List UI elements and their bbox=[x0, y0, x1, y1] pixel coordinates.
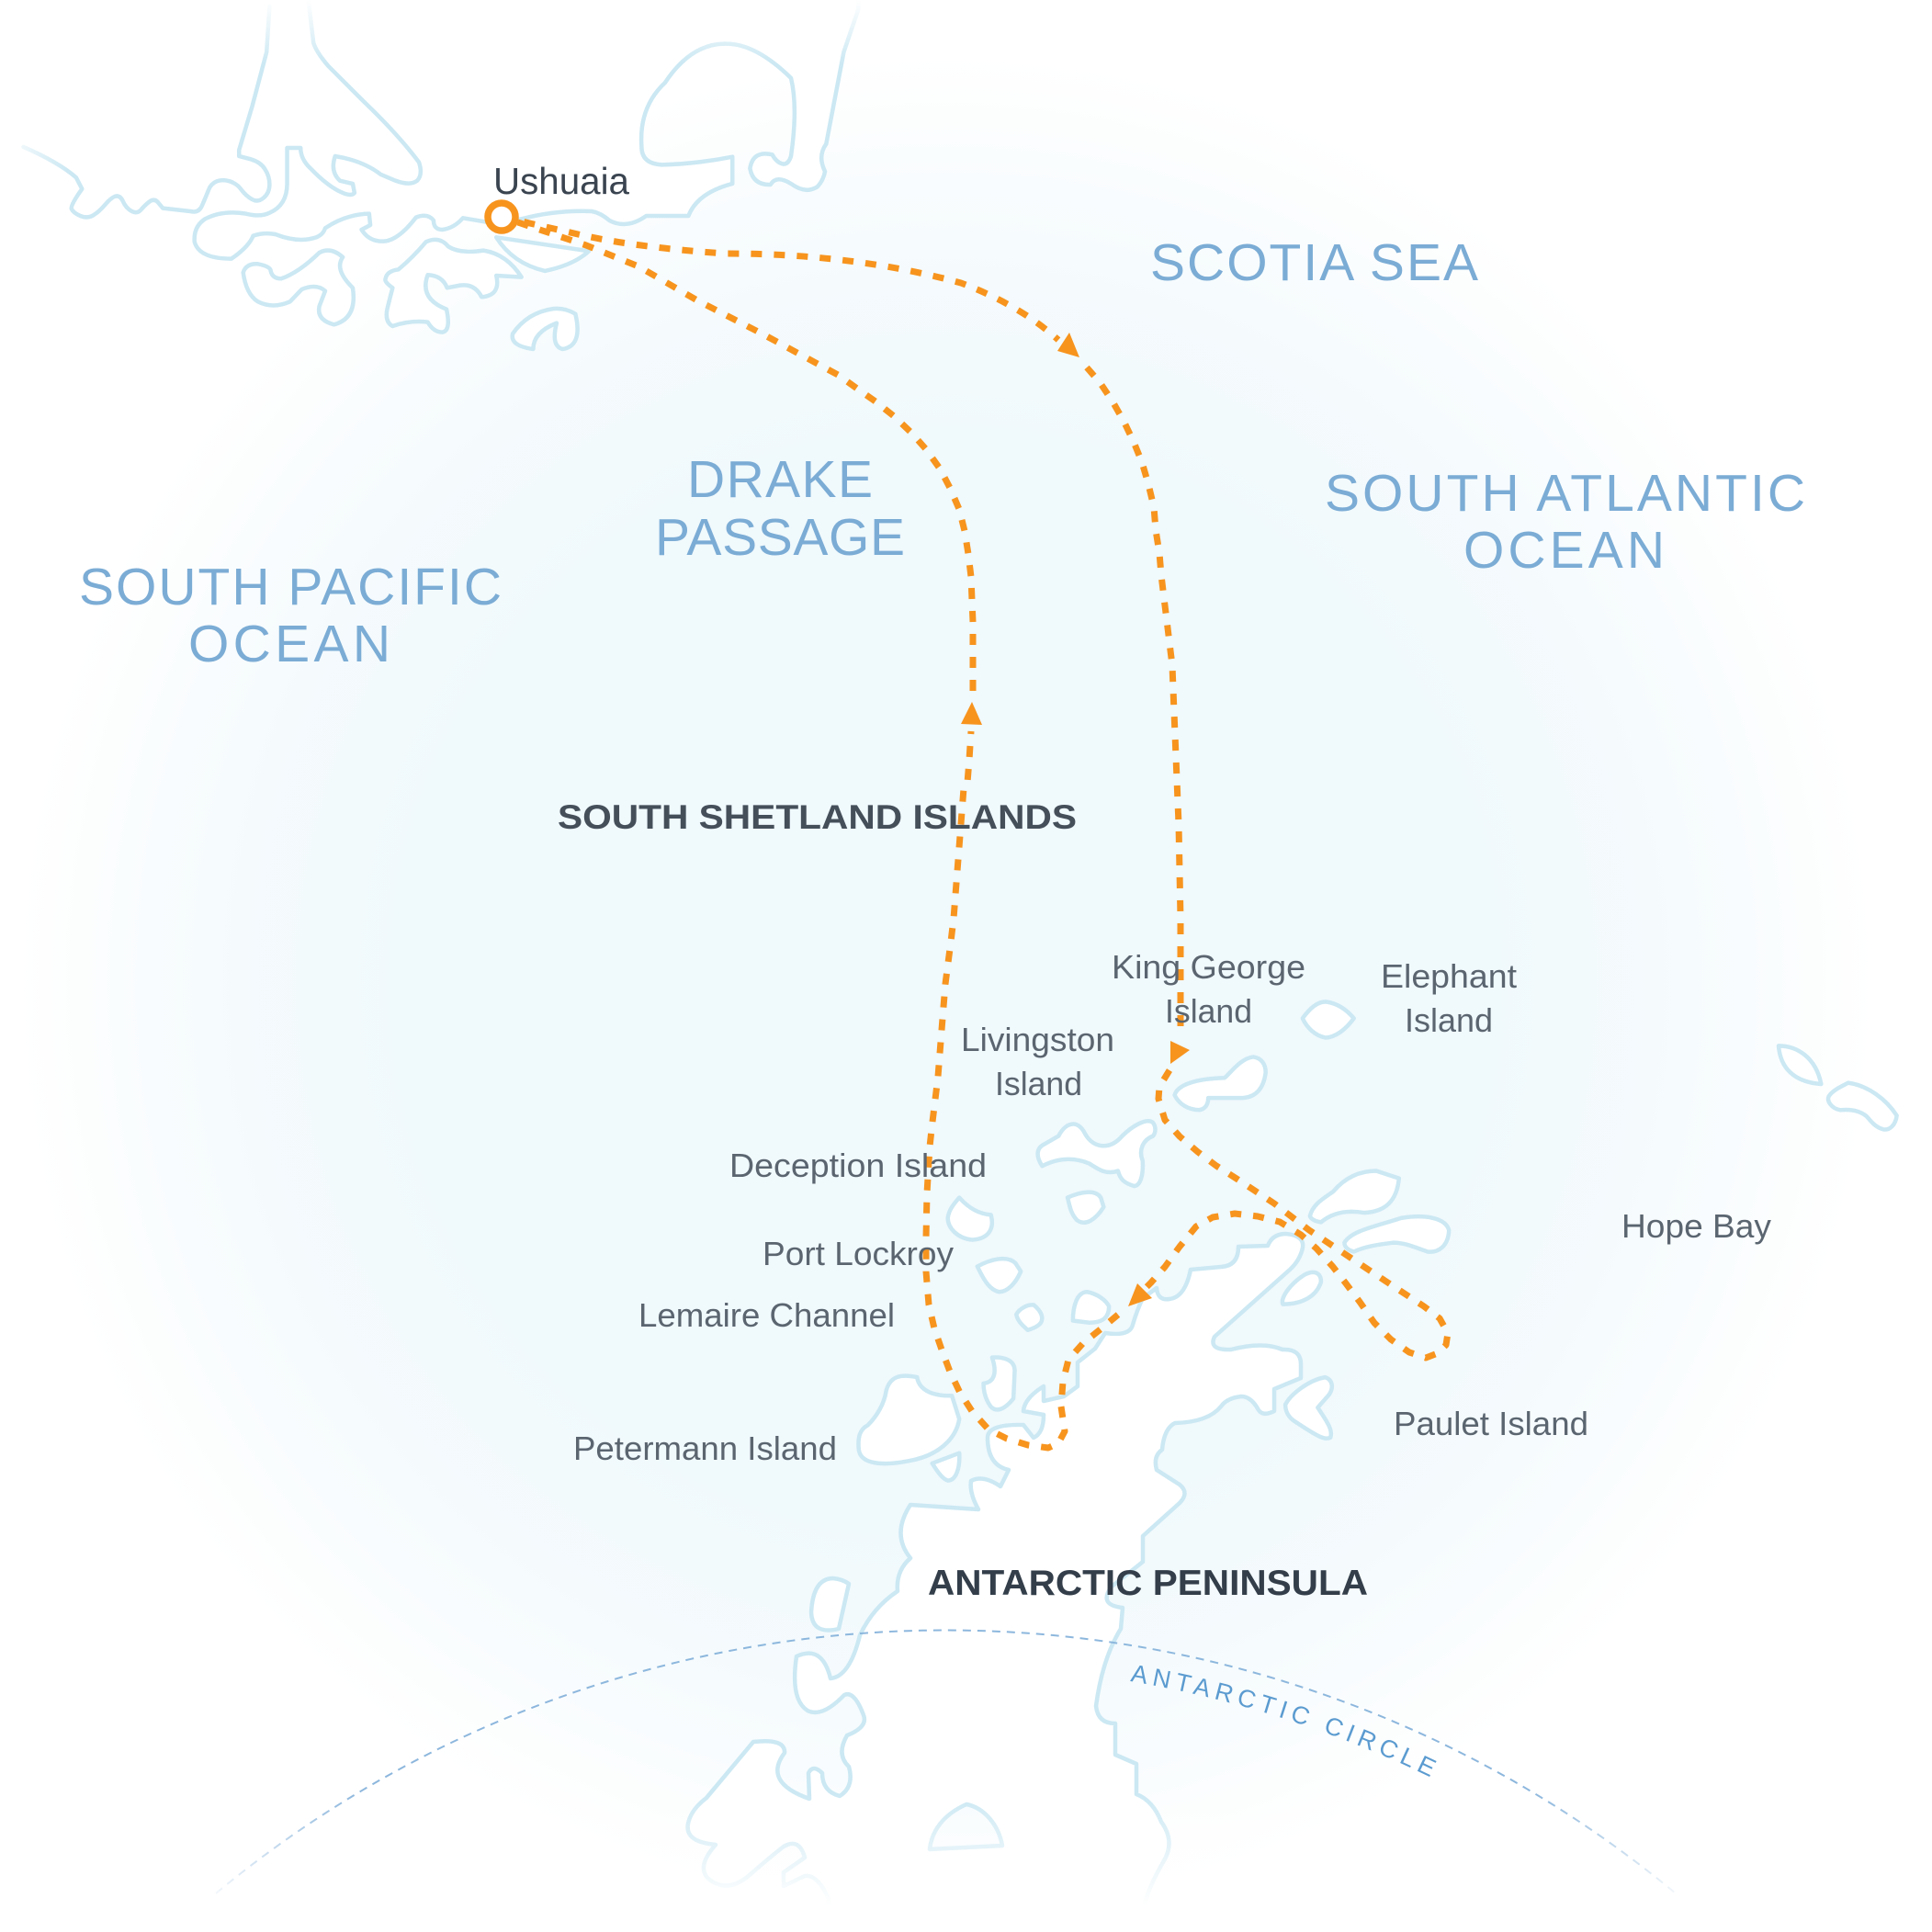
island: small south of livingston bbox=[1068, 1192, 1103, 1223]
land: south america bbox=[24, 0, 858, 349]
land: islands bbox=[858, 1001, 1449, 1481]
route bbox=[502, 217, 1448, 1448]
label: scotia sea: SCOTIA SEA bbox=[1150, 233, 1478, 292]
label: elephant island bbox=[1381, 957, 1517, 1039]
label: south pacific ocean bbox=[79, 558, 502, 673]
island: livingston bbox=[1038, 1121, 1155, 1186]
label: petermann island: Petermann Island bbox=[573, 1429, 837, 1467]
label: south shetland islands: SOUTH SHETLAND ISLANDS bbox=[558, 798, 1077, 836]
island: near coast bbox=[1073, 1292, 1109, 1323]
label: south pacific ocean: OCEAN bbox=[188, 615, 390, 673]
island: king george bbox=[1175, 1056, 1266, 1110]
label: drake passage bbox=[655, 450, 905, 567]
arrow: toward scotia sea bbox=[1057, 333, 1079, 357]
label: hope bay: Hope Bay bbox=[1621, 1207, 1771, 1245]
label: livingston island bbox=[961, 1021, 1114, 1102]
label: south atlantic ocean: SOUTH ATLANTIC bbox=[1325, 464, 1805, 523]
antarctic circle line bbox=[216, 1631, 1676, 1893]
island: north of hope bay bbox=[1310, 1171, 1399, 1222]
label: livingston island: Island bbox=[995, 1065, 1082, 1102]
label: drake passage: PASSAGE bbox=[655, 508, 905, 567]
land: antarctic peninsula bbox=[688, 1234, 1303, 1932]
label: king george island bbox=[1112, 948, 1305, 1030]
island: small bbox=[1016, 1305, 1042, 1330]
arrow: north through drake bbox=[961, 702, 982, 725]
label: port lockroy: Port Lockroy bbox=[763, 1235, 954, 1272]
label: drake passage: DRAKE bbox=[687, 450, 873, 509]
label: south atlantic ocean: OCEAN bbox=[1463, 521, 1665, 580]
island: east of hope bay bbox=[1344, 1216, 1449, 1252]
island: elephant bbox=[1303, 1001, 1354, 1037]
island: channel bbox=[984, 1358, 1015, 1409]
label: paulet island: Paulet Island bbox=[1394, 1405, 1588, 1442]
island: petermann bbox=[858, 1376, 959, 1463]
label: deception island: Deception Island bbox=[729, 1147, 987, 1184]
island: paulet side bbox=[1285, 1377, 1332, 1439]
label: antarctic peninsula: ANTARCTIC PENINSULA bbox=[928, 1564, 1368, 1603]
island: small triangular bbox=[932, 1453, 959, 1481]
label: lemaire channel: Lemaire Channel bbox=[638, 1296, 895, 1334]
arrow: along peninsula bbox=[1128, 1283, 1152, 1306]
label: livingston island: Livingston bbox=[961, 1021, 1114, 1058]
label: antarctic circle: ANTARCTIC CIRCLE bbox=[1130, 1665, 1437, 1777]
marker: ushuaia bbox=[488, 203, 515, 231]
label: south pacific ocean: SOUTH PACIFIC bbox=[79, 558, 502, 616]
land: far east islands bbox=[1779, 1045, 1897, 1130]
label: king george island: Island bbox=[1165, 992, 1252, 1030]
arrow: king george bbox=[1170, 1041, 1190, 1064]
label: elephant island: Elephant bbox=[1381, 957, 1517, 995]
island: port lockroy bbox=[977, 1259, 1021, 1292]
island: off peninsula tip bbox=[1282, 1272, 1321, 1305]
label: king george island: King George bbox=[1112, 948, 1305, 986]
label: ushuaia: Ushuaia bbox=[493, 160, 629, 202]
label: elephant island: Island bbox=[1405, 1001, 1493, 1039]
island: deception bbox=[948, 1198, 992, 1240]
label: south atlantic ocean bbox=[1325, 464, 1805, 580]
